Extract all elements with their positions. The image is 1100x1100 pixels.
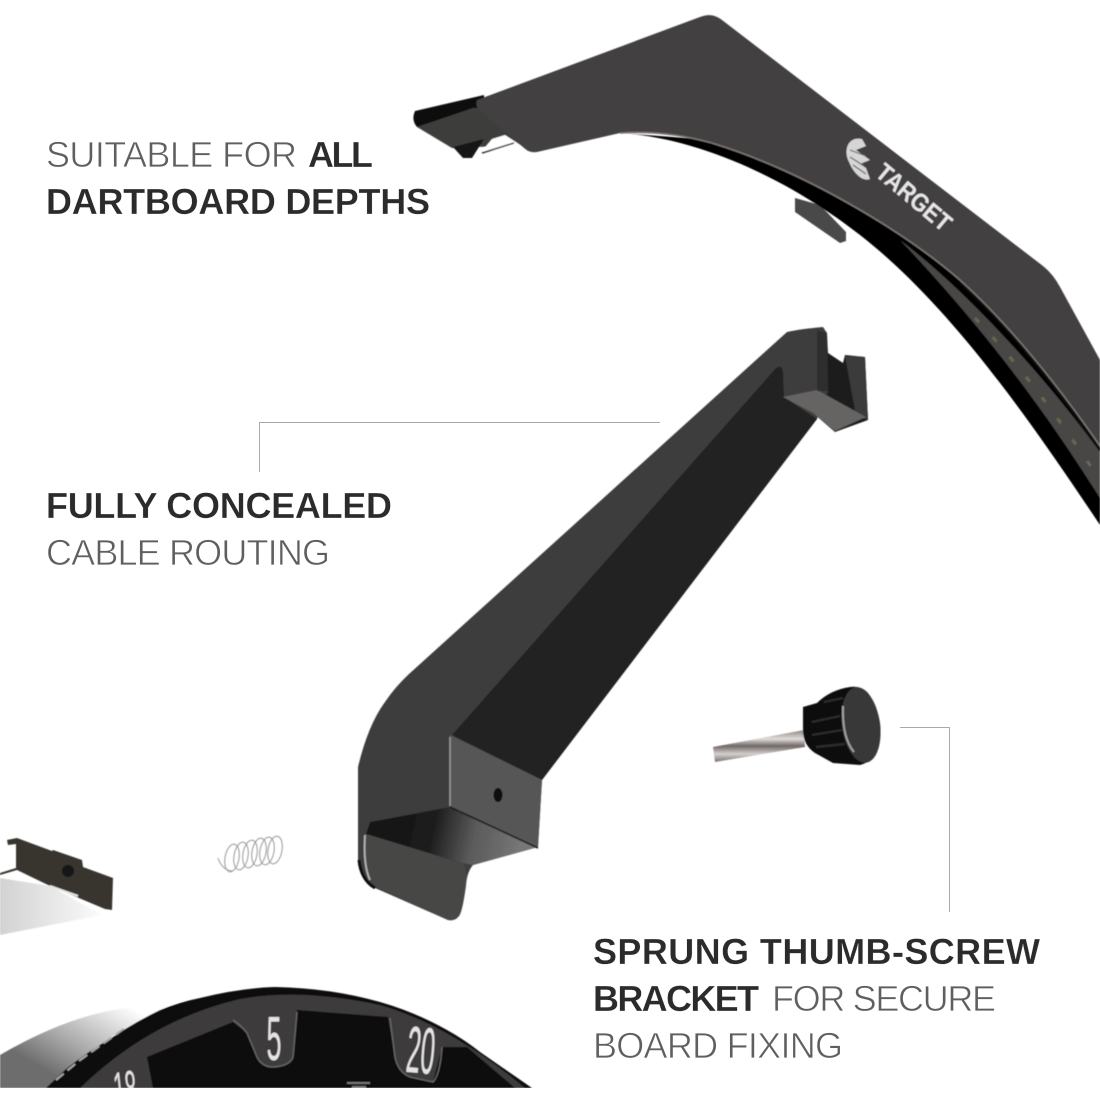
screw shaft — [713, 730, 805, 762]
knob face — [837, 685, 885, 765]
small left clip — [0, 838, 113, 935]
number ring — [80, 995, 525, 1088]
front face edge highlight — [449, 737, 451, 806]
bottom white margin — [0, 1088, 1100, 1100]
knurl grooves — [812, 698, 845, 747]
knurled knob — [803, 687, 880, 765]
screw hole — [494, 788, 502, 802]
tab outline 5 — [233, 1012, 297, 1067]
text: fully concealed cable routing: CABLE ROUTING — [46, 532, 330, 573]
bracket left tab — [413, 95, 528, 158]
rear clip under rim — [795, 198, 846, 243]
thumb screw — [713, 685, 885, 765]
hook left highlight — [365, 835, 370, 880]
board outer rim — [46, 987, 532, 1088]
white plate — [0, 878, 102, 935]
end block top — [783, 390, 866, 431]
clip highlight — [50, 886, 78, 896]
text: sprung thumb-screw bracket: FOR SECURE — [772, 978, 996, 1019]
plate edge highlight — [620, 132, 1100, 446]
spring — [218, 835, 284, 873]
rim tick marks — [975, 318, 1100, 480]
text: sprung thumb-screw bracket: SPRUNG THUMB-SCREW — [593, 931, 1040, 972]
bracket silhouette — [358, 327, 828, 920]
bracket plate — [476, 15, 1100, 446]
middle bracket — [358, 327, 868, 920]
dartboard — [0, 987, 532, 1100]
callout line: cable routing — [260, 422, 660, 472]
front end face — [450, 735, 542, 847]
text: suitable for all dartboard depths: ALL — [308, 134, 373, 175]
text: fully concealed cable routing — [46, 485, 392, 573]
black segments — [147, 1010, 515, 1088]
clip slot back — [813, 335, 868, 432]
text: sprung thumb-screw bracket — [593, 931, 1040, 1066]
dartboard: 5 — [266, 1005, 282, 1074]
clip screw — [62, 865, 74, 877]
tab outline 20 — [390, 1018, 442, 1082]
board side wall — [0, 988, 240, 1088]
logo emblem — [847, 139, 870, 180]
logo wordmark: TARGET — [870, 158, 957, 237]
clip body — [0, 838, 113, 910]
text: suitable for all dartboard depths: DARTBOARD DEPTHS — [46, 181, 430, 222]
end upright — [817, 330, 828, 391]
text: suitable for all dartboard depths — [46, 134, 430, 222]
knob face highlight — [843, 706, 854, 752]
hook face — [366, 834, 466, 920]
top curved bracket — [413, 15, 1100, 525]
rim grey band — [900, 240, 1100, 498]
underside edge line — [450, 807, 538, 848]
dartboard: 20 — [404, 1012, 438, 1088]
board centre marks — [347, 1083, 370, 1087]
plate edge shadow line — [960, 283, 1100, 450]
black rim arc — [620, 133, 1100, 525]
rim speckle — [56, 1028, 125, 1080]
text: suitable for all dartboard depths: SUITABLE FOR — [46, 134, 297, 175]
inner dark panel — [452, 367, 817, 780]
text: sprung thumb-screw bracket: BOARD FIXING — [593, 1025, 843, 1066]
underside shaded hook — [366, 807, 538, 865]
hook outer shadow — [359, 860, 375, 888]
text: sprung thumb-screw bracket: BRACKET — [593, 978, 759, 1019]
callout line: thumb screw — [900, 728, 950, 912]
text: fully concealed cable routing: FULLY CONCEALED — [46, 485, 392, 526]
